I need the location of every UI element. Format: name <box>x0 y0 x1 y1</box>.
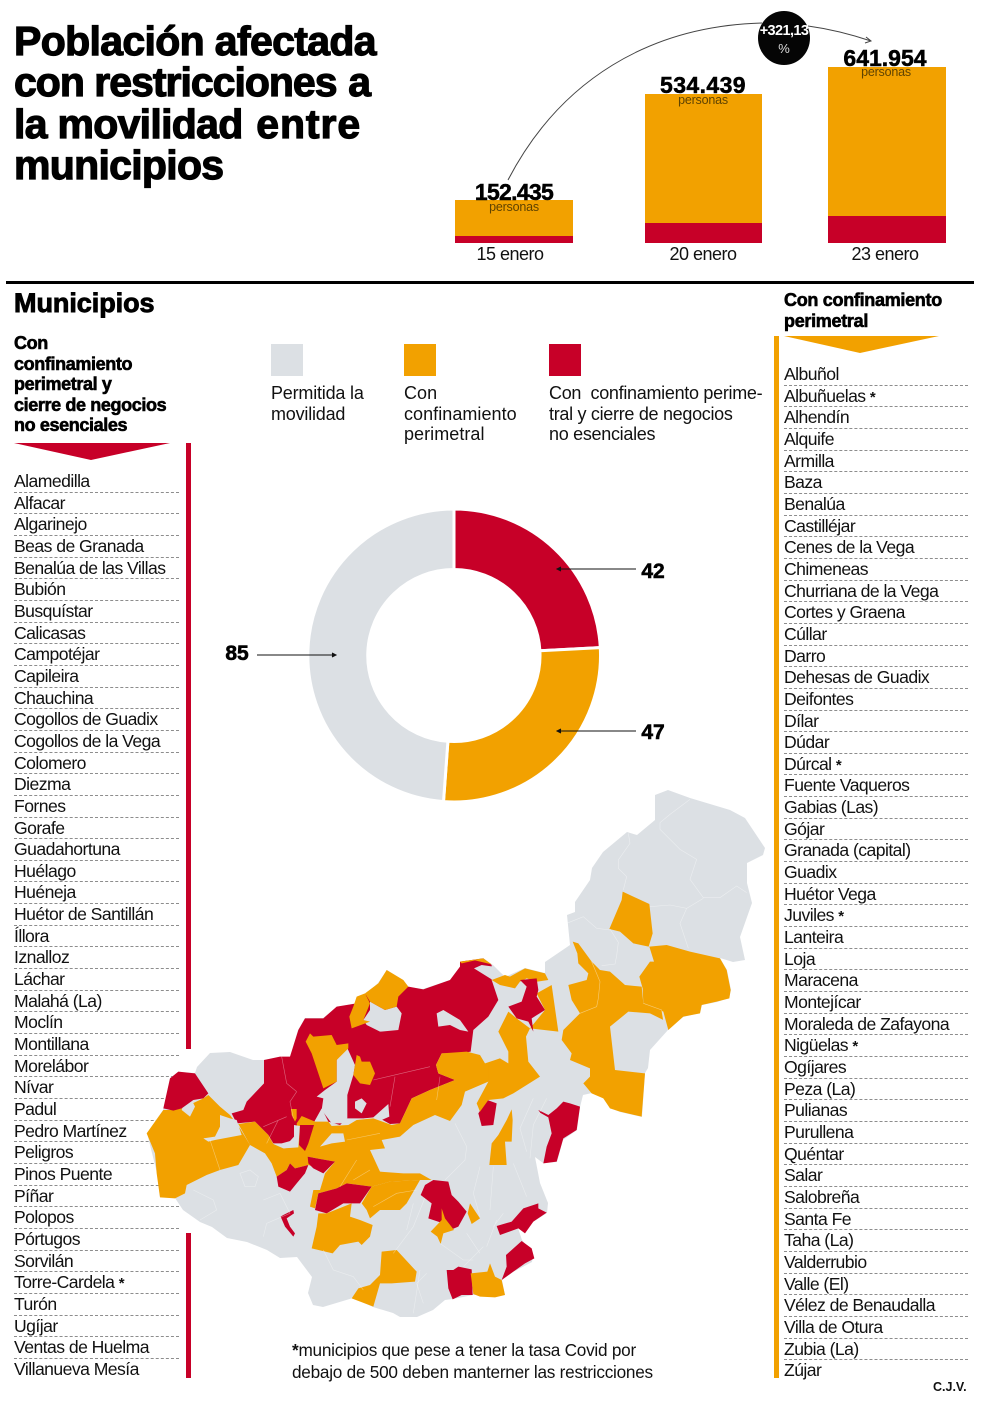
grey hole <box>355 1098 367 1113</box>
title: con restricciones a <box>14 59 370 105</box>
legend text: orange: confinamiento <box>404 404 517 424</box>
list: confinement and closures: Íllora <box>14 926 49 946</box>
list: confinement and closures: Villanueva Mesía <box>14 1359 139 1379</box>
bar: 20 enero <box>645 94 762 243</box>
title: la movilidad entre <box>14 101 361 147</box>
list: perimeter confinement: Benalúa <box>784 494 845 514</box>
list: confinement and closures: Fornes <box>14 796 65 816</box>
list: perimeter confinement: Zubia (La) <box>784 1339 859 1359</box>
legend text: red <box>549 383 762 444</box>
list: perimeter confinement: Quéntar <box>784 1144 844 1164</box>
list: confinement and closures: Pedro Martínez <box>14 1121 127 1141</box>
date: 20 enero: 20 enero <box>669 244 737 264</box>
list: perimeter confinement: Darro <box>784 646 825 666</box>
date: 15 enero: 15 enero <box>476 244 544 264</box>
list: perimeter confinement: Deifontes <box>784 689 853 709</box>
list: confinement and closures: Moclín <box>14 1012 63 1032</box>
orange west <box>147 1095 250 1198</box>
date: 23 enero: 23 enero <box>851 244 919 264</box>
legend text: grey <box>271 383 364 424</box>
list: perimeter confinement: Castilléjar <box>784 516 855 536</box>
red cluster <box>421 1180 467 1229</box>
red mass north <box>232 958 498 1143</box>
list: perimeter confinement: Cortes y Graena <box>784 602 905 622</box>
list: confinement and closures: Morelábor <box>14 1056 88 1076</box>
list: confinement and closures: Busquístar <box>14 601 93 621</box>
list: confinement and closures: Campotéjar <box>14 644 99 664</box>
heading: red list <box>14 333 166 435</box>
orange spot <box>468 1203 480 1224</box>
icon: red arrow <box>14 443 170 460</box>
icon: orange arrow <box>784 336 939 353</box>
list: confinement and closures: Huétor de Santillán <box>14 904 153 924</box>
footnote: debajo de 500 deben manterner las restricciones <box>292 1362 653 1382</box>
legend text: orange: perimetral <box>404 424 485 444</box>
list: confinement and closures: Pinos Puente <box>14 1164 112 1184</box>
list: confinement and closures: Bubión <box>14 579 65 599</box>
heading: Municipios: Municipios <box>14 288 154 318</box>
list: perimeter confinement: Alquife <box>784 429 834 449</box>
legend text: red: no esenciales <box>549 424 655 444</box>
map: northeast pieces <box>460 799 747 1117</box>
list: confinement and closures: Diezma <box>14 774 70 794</box>
list: perimeter confinement: Santa Fe <box>784 1209 851 1229</box>
orange top edge <box>460 958 492 964</box>
orange small <box>353 1055 375 1085</box>
orange south coast <box>471 1263 505 1297</box>
list: confinement and closures <box>14 471 179 1379</box>
list: confinement and closures: Algarinejo <box>14 514 87 534</box>
red northeast <box>508 978 545 1032</box>
list: confinement and closures: Píñar <box>14 1186 53 1206</box>
list: confinement and closures: Alamedilla <box>14 471 90 491</box>
list: confinement and closures: Pórtugos <box>14 1229 80 1249</box>
map base: grey municipalities <box>147 790 765 1317</box>
list: perimeter confinement: Fuente Vaqueros <box>784 775 909 795</box>
list: perimeter confinement: Ogíjares <box>784 1057 846 1077</box>
list: perimeter confinement: Gójar <box>784 819 824 839</box>
list: confinement and closures: Chauchina <box>14 688 93 708</box>
list: perimeter confinement: Churriana de la Vega <box>784 581 938 601</box>
legend <box>271 344 762 444</box>
list: perimeter confinement: Taha (La) <box>784 1230 853 1250</box>
list: perimeter confinement: Albuñol <box>784 364 839 384</box>
map: southeast pieces <box>407 1077 580 1313</box>
list: perimeter confinement: Dílar <box>784 710 818 730</box>
red south <box>447 1267 473 1299</box>
orange strip <box>489 1109 513 1165</box>
list: perimeter confinement: Lanteira <box>784 927 843 947</box>
number: 85: 85 <box>225 642 249 665</box>
list: perimeter confinement: Zújar <box>784 1360 821 1380</box>
list: confinement and closures: Láchar <box>14 969 64 989</box>
list: confinement and closures: Ugíjar <box>14 1316 58 1336</box>
title: Población afectada <box>14 18 376 64</box>
number: 42: 42 <box>641 560 665 583</box>
value: 534.439: 534.439 <box>660 72 746 98</box>
list: perimeter confinement: Cenes de la Vega <box>784 537 914 557</box>
legend text: orange: Con <box>404 383 437 403</box>
grey patch in cluster <box>320 1133 345 1147</box>
list: confinement and closures: Polopos <box>14 1207 74 1227</box>
heading: red list: confinamiento <box>14 354 132 374</box>
red centre <box>315 1183 372 1213</box>
heading: red list: no esenciales <box>14 415 127 435</box>
list: confinement and closures: Beas de Granada <box>14 536 144 556</box>
heading: red list: cierre de negocios <box>14 394 166 414</box>
orange mid strip <box>530 985 558 1032</box>
red coast <box>502 1241 534 1280</box>
credit: C.J.V. <box>933 1380 967 1394</box>
list: perimeter confinement: Gabias (Las) <box>784 797 878 817</box>
list: perimeter confinement: Montejícar <box>784 992 861 1012</box>
list: confinement and closures: Huélago <box>14 861 76 881</box>
list: perimeter confinement: Valderrubio <box>784 1252 867 1272</box>
red side bar lower <box>186 1233 190 1378</box>
list: perimeter confinement: Chimeneas <box>784 559 868 579</box>
orange central cluster <box>238 1052 500 1208</box>
list: perimeter confinement: Dúdar <box>784 732 829 752</box>
number: 47: 47 <box>641 721 665 744</box>
map: red and orange central-west <box>147 958 505 1307</box>
grey patch west <box>182 1100 195 1117</box>
legend swatch: red <box>549 344 581 376</box>
list: perimeter confinement: Purullena <box>784 1122 853 1142</box>
list: perimeter confinement: Dehesas de Guadix <box>784 667 929 687</box>
list: confinement and closures: Padul <box>14 1099 56 1119</box>
title: municipios <box>14 142 223 188</box>
orange star <box>431 1208 454 1244</box>
list: perimeter confinement: Huétor Vega <box>784 884 876 904</box>
list: perimeter confinement: Loja <box>784 949 815 969</box>
orange sliver <box>291 1109 297 1122</box>
list: perimeter confinement: Maracena <box>784 970 858 990</box>
heading: red list: perimetral y <box>14 374 112 394</box>
orange north side <box>349 993 370 1028</box>
leader: 42 <box>557 567 636 571</box>
list: confinement and closures: Cogollos de Guadix <box>14 709 158 729</box>
list: confinement and closures: Cogollos de la Vega <box>14 731 160 751</box>
list: perimeter confinement: Guadix <box>784 862 836 882</box>
leader: 85 <box>257 653 336 657</box>
legend text: red: tral y cierre de negocios <box>549 404 733 424</box>
list: perimeter confinement: Salar <box>784 1165 822 1185</box>
title <box>14 18 378 188</box>
grey patch west 2 <box>203 1115 242 1142</box>
orange east of centre <box>362 1180 420 1218</box>
heading: orange list: perimetral <box>784 311 868 331</box>
red small <box>478 1100 497 1126</box>
heading: red list: Con <box>14 333 48 353</box>
arrow: growth curve <box>508 22 872 180</box>
red wedge <box>308 1157 335 1173</box>
list: perimeter confinement: Alhendín <box>784 407 849 427</box>
callout: percent growth: % <box>778 41 790 56</box>
list: perimeter confinement: Albuñuelas * <box>784 386 875 406</box>
footnote <box>292 1340 653 1382</box>
value: 641.954: 641.954 <box>843 45 927 71</box>
list: perimeter confinement: Baza <box>784 472 822 492</box>
slice: 42 <box>454 509 600 651</box>
red hook <box>281 1210 295 1237</box>
orange central big <box>562 942 663 1117</box>
grey gap <box>283 1125 300 1148</box>
bar chart: population per date <box>455 45 946 264</box>
legend text: grey: Permitida la <box>271 383 364 403</box>
callout: percent growth <box>758 11 810 65</box>
list: confinement and closures: Capileira <box>14 666 78 686</box>
legend text: orange <box>404 383 517 444</box>
grey gaps in red mass <box>317 1047 355 1123</box>
border lines <box>193 1057 430 1303</box>
red south of cluster <box>277 1163 308 1192</box>
legend text: grey: movilidad <box>271 404 345 424</box>
list: perimeter confinement: Vélez de Benaudalla <box>784 1295 935 1315</box>
list: perimeter confinement: Armilla <box>784 451 834 471</box>
slice: 85 <box>308 509 454 802</box>
orange north <box>365 970 408 1010</box>
list: perimeter confinement: Nigüelas * <box>784 1035 858 1055</box>
list: confinement and closures: Montillana <box>14 1034 89 1054</box>
slice: 47 <box>444 648 601 802</box>
list: confinement and closures: Guadahortuna <box>14 839 120 859</box>
unit: personas 1: personas <box>489 200 539 214</box>
orange mid <box>477 1012 540 1112</box>
legend swatch: grey <box>271 344 303 376</box>
orange top band <box>492 968 548 988</box>
bar: 15 enero <box>455 200 573 243</box>
grey blob north <box>474 965 505 980</box>
grey wedge <box>364 1104 389 1121</box>
heading: orange list <box>784 290 942 332</box>
list: confinement and closures: Huéneja <box>14 882 76 902</box>
list: confinement and closures: Torre-Cardela * <box>14 1272 124 1292</box>
orange south <box>352 1250 417 1307</box>
list: confinement and closures: Calicasas <box>14 623 85 643</box>
bar: 23 enero <box>828 67 946 243</box>
grey inlet north <box>363 1002 402 1032</box>
list: perimeter confinement: Salobreña <box>784 1187 859 1207</box>
red side bar <box>186 443 190 1049</box>
border lines <box>567 799 747 1020</box>
list: confinement and closures: Turón <box>14 1294 57 1314</box>
orange side bar <box>774 336 778 1378</box>
red strip <box>299 1125 314 1151</box>
grey inlet east <box>437 1010 468 1032</box>
orange centre north <box>306 1033 348 1088</box>
footnote: *municipios que pese a tener la tasa Covid por <box>292 1340 636 1360</box>
list: perimeter confinement: Granada (capital) <box>784 840 911 860</box>
list: perimeter confinement: Cúllar <box>784 624 827 644</box>
list: confinement and closures: Iznalloz <box>14 947 69 967</box>
callout: percent growth: +321,13 <box>760 23 808 39</box>
legend swatch: orange <box>404 344 436 376</box>
red east <box>497 1203 547 1235</box>
orange north small <box>609 892 653 947</box>
list: confinement and closures: Alfacar <box>14 493 65 513</box>
list: perimeter confinement: Pulianas <box>784 1100 847 1120</box>
list: confinement and closures: Gorafe <box>14 818 64 838</box>
list: perimeter confinement: Villa de Otura <box>784 1317 883 1337</box>
red northwest <box>163 1072 208 1111</box>
list: perimeter confinement: Moraleda de Zafayona <box>784 1014 949 1034</box>
legend text: red: Con confinamiento perime- <box>549 383 762 403</box>
border lines <box>407 1077 547 1313</box>
red far east <box>538 1102 580 1163</box>
list: confinement and closures: Malahá (La) <box>14 991 102 1011</box>
list: confinement and closures: Peligros <box>14 1142 73 1162</box>
unit: personas 3: personas <box>861 65 911 79</box>
list: confinement and closures: Nívar <box>14 1077 53 1097</box>
list: perimeter confinement: Dúrcal * <box>784 754 841 774</box>
list: confinement and closures: Colomero <box>14 753 86 773</box>
leader: 47 <box>557 729 636 733</box>
list: confinement and closures: Sorvilán <box>14 1251 73 1271</box>
orange northeast big <box>639 945 731 1030</box>
list: perimeter confinement: Juviles * <box>784 905 844 925</box>
value: 152.435: 152.435 <box>475 179 553 205</box>
list: perimeter confinement: Valle (El) <box>784 1274 849 1294</box>
list: confinement and closures: Benalúa de las Villas <box>14 558 165 578</box>
donut chart <box>225 510 665 800</box>
list: perimeter confinement <box>784 364 968 1380</box>
list: perimeter confinement: Peza (La) <box>784 1079 855 1099</box>
orange centre south <box>312 1203 373 1253</box>
list: confinement and closures: Ventas de Huelma <box>14 1337 149 1357</box>
unit: personas 2: personas <box>678 93 728 107</box>
heading: orange list: Con confinamiento <box>784 290 942 310</box>
